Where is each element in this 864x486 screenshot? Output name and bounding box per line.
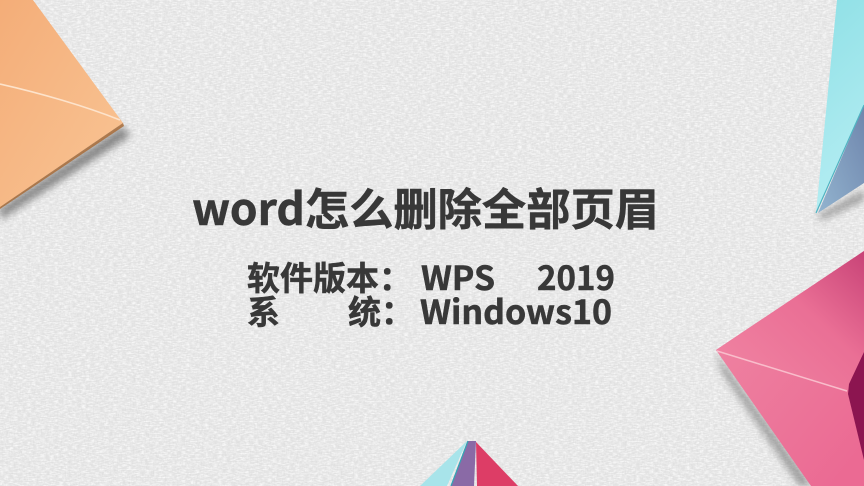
subtitle line: operating system: 系 (247, 286, 280, 334)
subtitle line: software version: WPS (421, 252, 495, 300)
subtitle line: operating system: Windows10 (420, 286, 612, 334)
pink origami shape (716, 251, 864, 486)
cyan origami shape (816, 0, 864, 220)
subtitle line: operating system (247, 286, 612, 334)
title: word怎么删除全部页眉 (192, 174, 659, 238)
subtitle line: software version (247, 252, 615, 300)
subtitle line: operating system: 统： (348, 286, 414, 334)
orange origami shape (0, 0, 130, 220)
bottom origami shape (420, 441, 518, 486)
subtitle line: software version: 2019 (537, 252, 615, 300)
subtitle line: software version: 软件版本： (247, 252, 412, 300)
